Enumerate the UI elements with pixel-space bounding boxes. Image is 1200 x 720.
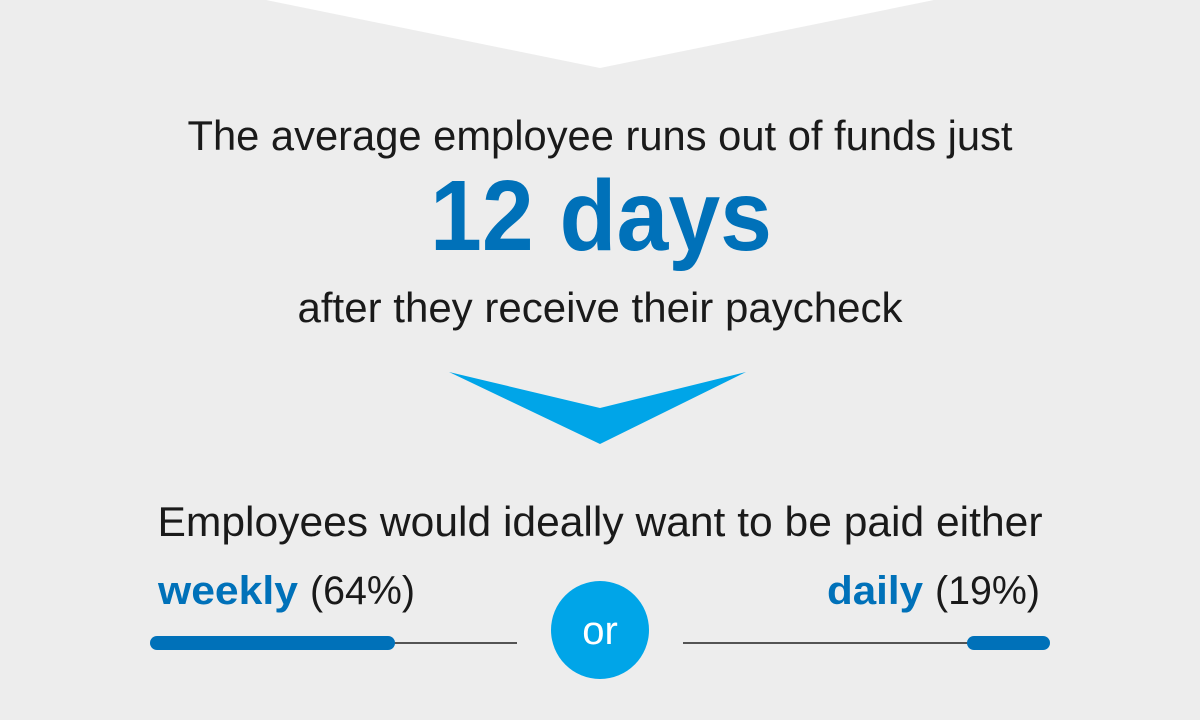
- or circle: or: [582, 609, 618, 653]
- label: daily: [827, 569, 1040, 613]
- big stat: 12 days: 12 days: [430, 160, 772, 272]
- bar: daily: [683, 636, 1050, 650]
- heading line 3: after they receive their paycheck: [298, 284, 903, 331]
- heading line 1: The average employee runs out of funds just: [188, 112, 1013, 159]
- arrow: blue chevron down: [449, 372, 746, 444]
- label: daily: (19%): [935, 569, 1040, 613]
- label: daily: daily: [827, 569, 924, 613]
- label: weekly: weekly: [157, 569, 299, 613]
- question text: Employees would ideally want to be paid either: [158, 498, 1043, 545]
- top white chevron: [266, 0, 934, 68]
- bar: weekly: [150, 636, 517, 650]
- label: weekly: (64%): [310, 569, 415, 613]
- label: weekly: [157, 569, 415, 613]
- or circle: [551, 581, 649, 679]
